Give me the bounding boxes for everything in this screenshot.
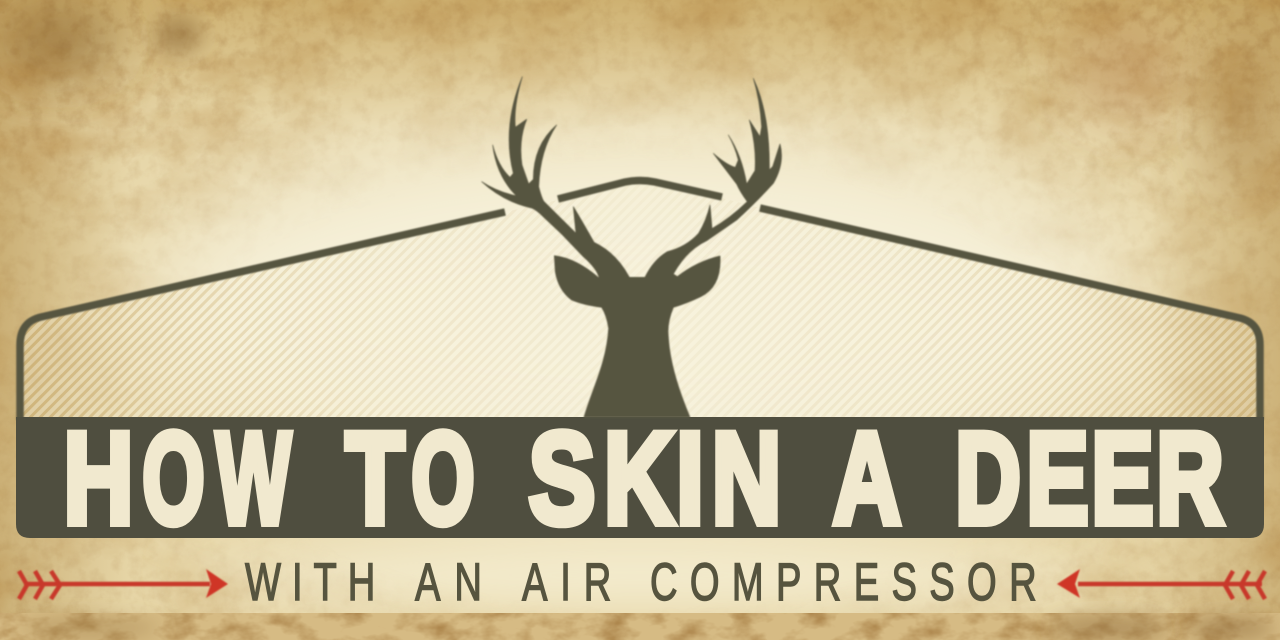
- title: HOW TO SKIN A DEER: O: [411, 406, 475, 551]
- title: HOW TO SKIN A DEER: H: [64, 406, 133, 551]
- subtitle: WITH AN AIR COMPRESSOR: WITH: [245, 552, 375, 611]
- title: HOW TO SKIN A DEER: I: [676, 405, 704, 551]
- subtitle: WITH AN AIR COMPRESSOR: COMPRESSOR: [650, 552, 1037, 611]
- title: HOW TO SKIN A DEER: W: [216, 406, 291, 551]
- title: HOW TO SKIN A DEER: E: [1026, 406, 1089, 552]
- title: HOW TO SKIN A DEER: O: [142, 405, 205, 551]
- title: HOW TO SKIN A DEER: E: [1091, 406, 1154, 552]
- left red arrow: [19, 569, 228, 599]
- title: HOW TO SKIN A DEER: A: [833, 406, 901, 552]
- title: HOW TO SKIN A DEER: N: [712, 406, 781, 551]
- hatched panel inside the frame: [23, 198, 1257, 417]
- title: HOW TO SKIN A DEER: D: [955, 405, 1021, 551]
- deer head silhouette: [482, 77, 781, 417]
- subtitle: WITH AN AIR COMPRESSOR: [245, 552, 1037, 611]
- title: HOW TO SKIN A DEER: S: [529, 405, 595, 551]
- subtitle: WITH AN AIR COMPRESSOR: AIR: [522, 552, 611, 611]
- right red arrow: [1057, 569, 1265, 599]
- title: HOW TO SKIN A DEER: R: [1156, 406, 1224, 552]
- title: HOW TO SKIN A DEER: K: [604, 406, 674, 551]
- title: HOW TO SKIN A DEER: T: [346, 406, 404, 551]
- roof frame outline: [20, 180, 1260, 420]
- title: HOW TO SKIN A DEER: [64, 405, 1224, 552]
- title banner: [16, 417, 1264, 538]
- subtitle: WITH AN AIR COMPRESSOR: AN: [415, 552, 482, 611]
